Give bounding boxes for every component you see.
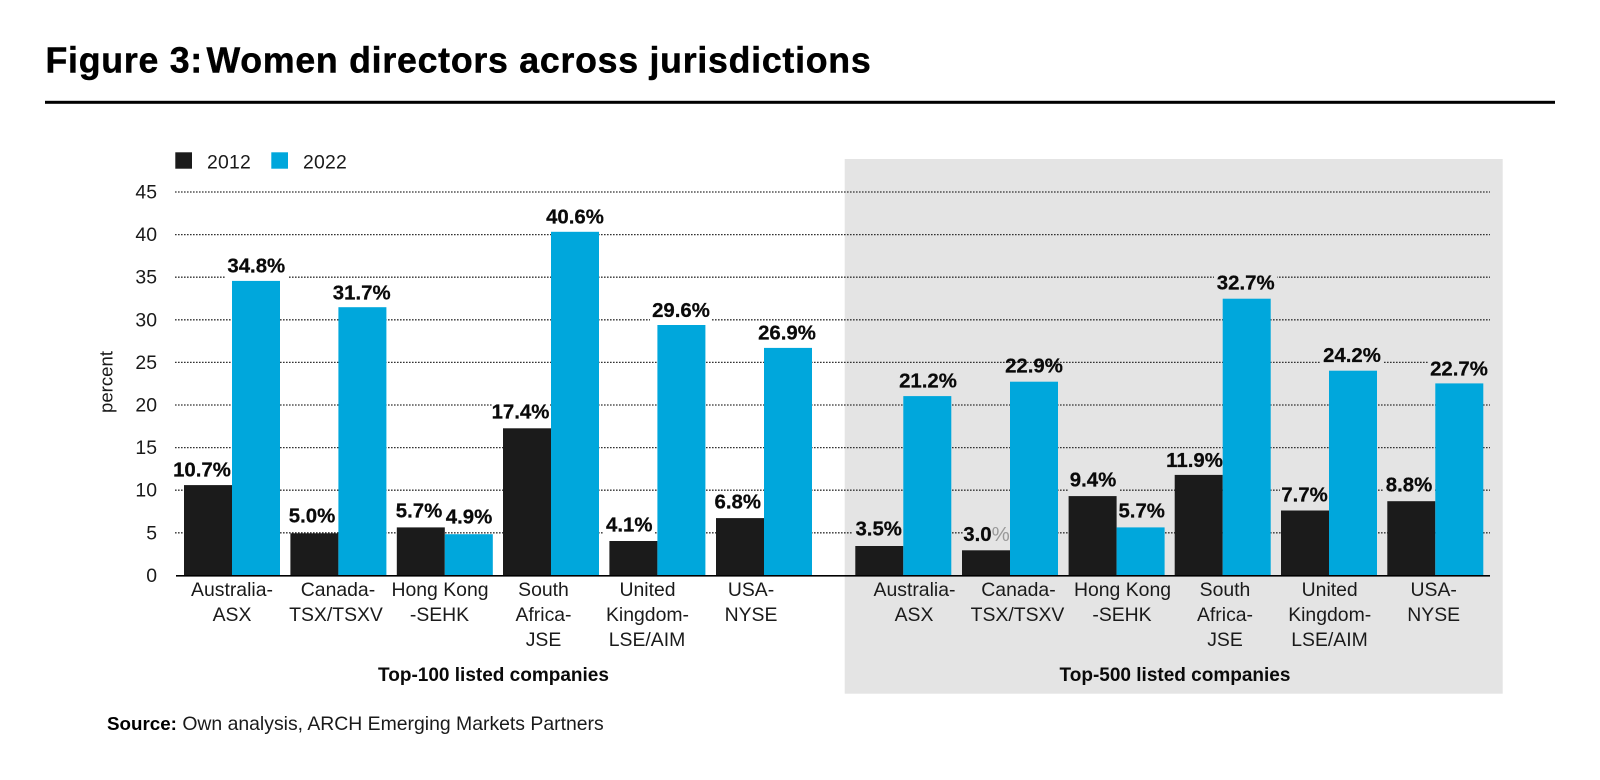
group: United Kingdom-LSE/AIM: LSE/AIM: [609, 629, 685, 651]
y axis labels: 35: [135, 267, 157, 289]
title: Figure 3:: [46, 41, 203, 81]
group: Hong Kong-SEHK: [391, 501, 493, 626]
group: Australia-ASX: ASX: [895, 604, 933, 626]
group: Hong Kong-SEHK: Hong Kong: [1074, 579, 1171, 601]
group: South Africa-JSE: [1166, 273, 1275, 651]
y axis labels: 45: [135, 182, 157, 204]
group: USA-NYSE: 8.8%: [1386, 475, 1432, 497]
group: South Africa-JSE: 40.6%: [546, 206, 604, 228]
legend item: 2012: 2012: [207, 151, 251, 173]
group: Hong Kong-SEHK: -SEHK: [410, 604, 469, 626]
y axis labels: 30: [135, 309, 157, 331]
group: South Africa-JSE: 11.9%: [1166, 450, 1223, 472]
group: Australia-ASX: Australia-: [874, 579, 955, 601]
group: Canada-TSX/TSXV: Canada-: [981, 579, 1056, 601]
group: United Kingdom-LSE/AIM: United: [1302, 579, 1358, 601]
group: Canada-TSX/TSXV: 31.7%: [333, 282, 391, 304]
group: Australia-ASX: Australia-: [191, 579, 273, 601]
group: United Kingdom-LSE/AIM: 24.2%: [1323, 345, 1381, 367]
y axis title: percent: [96, 350, 116, 413]
group: Australia-ASX: ASX: [213, 604, 251, 626]
panel: top-500 background: [845, 159, 1503, 694]
group: South Africa-JSE: Africa-: [1197, 604, 1253, 626]
group: Canada-TSX/TSXV: TSX/TSXV: [971, 604, 1064, 626]
group: Australia-ASX: 21.2%: [899, 370, 957, 392]
legend item: 2022: 2022: [303, 151, 347, 173]
group: Hong Kong-SEHK: 9.4%: [1070, 470, 1116, 492]
group: United Kingdom-LSE/AIM: Kingdom-: [606, 604, 689, 626]
group: South Africa-JSE: South: [1200, 579, 1250, 601]
legend item: 2012: [175, 151, 251, 173]
group: USA-NYSE: [715, 322, 816, 626]
group: Canada-TSX/TSXV: [289, 282, 391, 626]
group: Australia-ASX: [173, 256, 285, 626]
group: South Africa-JSE: [492, 206, 604, 651]
y axis labels: 5: [146, 522, 157, 544]
group: Australia-ASX: 34.8%: [227, 256, 285, 278]
y axis labels: [135, 182, 157, 587]
group: USA-NYSE: 26.9%: [758, 322, 816, 344]
group: Hong Kong-SEHK: -SEHK: [1092, 604, 1152, 626]
chart: top-100 listed companies: [173, 206, 816, 686]
group: Hong Kong-SEHK: 5.7%: [396, 501, 442, 523]
y axis labels: 10: [135, 480, 157, 502]
group: Hong Kong-SEHK: 5.7%: [1118, 501, 1165, 523]
group: Australia-ASX: 10.7%: [173, 460, 231, 482]
group: South Africa-JSE: South: [518, 579, 569, 601]
group: Hong Kong-SEHK: 4.9%: [446, 506, 492, 528]
group: Hong Kong-SEHK: [1069, 470, 1171, 626]
group: United Kingdom-LSE/AIM: LSE/AIM: [1291, 629, 1368, 651]
heading: top-500: Top-500 listed companies: [1060, 665, 1290, 686]
group: South Africa-JSE: JSE: [1207, 629, 1243, 651]
y axis labels: 40: [135, 224, 157, 246]
group: South Africa-JSE: 17.4%: [492, 402, 549, 424]
group: Canada-TSX/TSXV: 5.0%: [289, 506, 335, 528]
group: Hong Kong-SEHK: Hong Kong: [391, 579, 489, 601]
group: USA-NYSE: NYSE: [725, 604, 777, 626]
chart: top-500 listed companies: [855, 273, 1488, 686]
group: Canada-TSX/TSXV: Canada-: [301, 579, 375, 601]
group: South Africa-JSE: JSE: [526, 629, 561, 651]
group: United Kingdom-LSE/AIM: [1281, 345, 1381, 651]
legend item: 2022: [271, 151, 347, 173]
group: United Kingdom-LSE/AIM: Kingdom-: [1288, 604, 1371, 626]
title: Women directors across jurisdictions: [206, 41, 871, 81]
heading: top-100: Top-100 listed companies: [378, 665, 609, 686]
group: Canada-TSX/TSXV: TSX/TSXV: [289, 604, 383, 626]
group: USA-NYSE: 6.8%: [715, 492, 761, 514]
group: USA-NYSE: NYSE: [1407, 604, 1460, 626]
group: Canada-TSX/TSXV: [962, 356, 1064, 626]
source note: Source: Own analysis, ARCH Emerging Markets Partners: [107, 713, 604, 735]
group: Canada-TSX/TSXV: 3.0%: [963, 524, 1010, 546]
y axis labels: 20: [135, 394, 157, 416]
y axis labels: 15: [135, 437, 157, 459]
y axis labels: 25: [135, 352, 157, 374]
group: United Kingdom-LSE/AIM: United: [619, 579, 676, 601]
group: Australia-ASX: 3.5%: [855, 519, 902, 541]
group: United Kingdom-LSE/AIM: 4.1%: [606, 515, 653, 537]
group: South Africa-JSE: 32.7%: [1217, 273, 1275, 295]
group: South Africa-JSE: Africa-: [515, 604, 572, 626]
group: USA-NYSE: USA-: [728, 579, 774, 601]
y axis labels: 0: [146, 565, 157, 587]
group: USA-NYSE: USA-: [1411, 579, 1457, 601]
group: Canada-TSX/TSXV: 22.9%: [1005, 356, 1063, 378]
group: United Kingdom-LSE/AIM: 29.6%: [652, 300, 710, 322]
group: Australia-ASX: [855, 370, 957, 626]
group: United Kingdom-LSE/AIM: 7.7%: [1281, 485, 1328, 507]
group: USA-NYSE: [1386, 358, 1488, 626]
legend: [175, 151, 347, 173]
group: USA-NYSE: 22.7%: [1430, 358, 1488, 380]
group: United Kingdom-LSE/AIM: [606, 300, 710, 651]
